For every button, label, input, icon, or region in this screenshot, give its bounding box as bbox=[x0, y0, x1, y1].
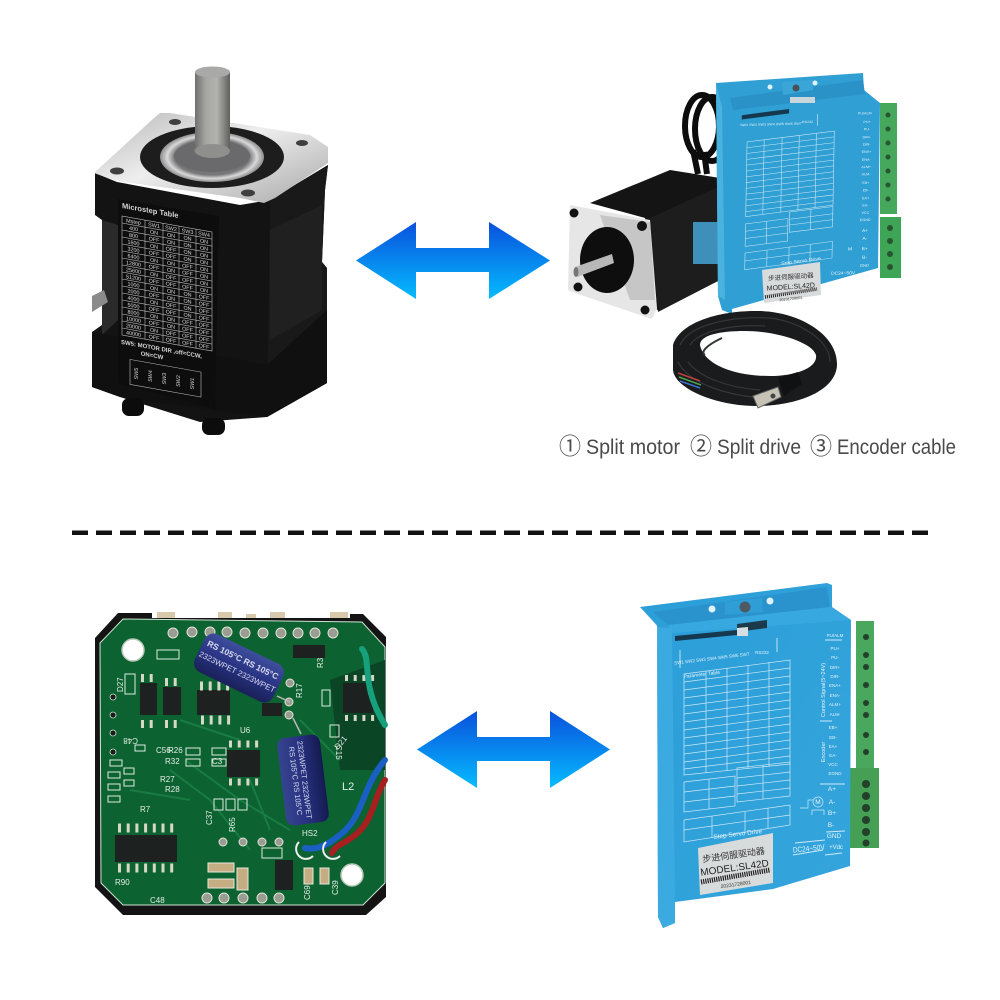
microstep table label: ON bbox=[167, 289, 175, 296]
silkscreen labels: U6 bbox=[240, 726, 251, 735]
circuit board photo bbox=[95, 612, 386, 915]
split motor and drive photo bbox=[568, 73, 901, 408]
silkscreen labels bbox=[115, 657, 354, 905]
microstep table label: OFF bbox=[199, 294, 210, 302]
microstep table label: ON bbox=[150, 300, 158, 307]
drive printed face: A- bbox=[829, 799, 835, 806]
microstep table label: SW5 bbox=[134, 367, 140, 380]
drive printed face: M bbox=[815, 799, 821, 806]
drive printed face: ALM- bbox=[830, 712, 841, 717]
silkscreen labels: R17 bbox=[295, 683, 304, 698]
drive printed face: ALM+ bbox=[861, 165, 871, 169]
silkscreen labels: D27 bbox=[116, 677, 125, 692]
microstep table label: ON bbox=[167, 296, 175, 303]
microstep table label: ON bbox=[200, 266, 208, 274]
caption: parts list: ② bbox=[690, 433, 712, 459]
microstep table label: OFF bbox=[166, 246, 177, 254]
microstep table label: OFF bbox=[199, 308, 210, 316]
silkscreen labels: R90 bbox=[115, 878, 130, 887]
drive printed face: DIR- bbox=[863, 143, 870, 147]
microstep table label: ON bbox=[200, 287, 208, 295]
microstep table label: OFF bbox=[182, 333, 194, 341]
microstep table label: ON bbox=[200, 252, 208, 260]
drive printed face: PU- bbox=[831, 655, 839, 660]
microstep table label: OFF bbox=[166, 274, 177, 282]
motor flange plate bbox=[94, 105, 328, 203]
drive printed face: B+ bbox=[862, 246, 868, 251]
drive printed face: PU- bbox=[864, 127, 870, 131]
integrated motor photo bbox=[92, 66, 328, 435]
drive model label bbox=[762, 262, 821, 303]
microstep table label: ON bbox=[200, 238, 208, 246]
microstep table label: OFF bbox=[149, 236, 160, 244]
drive printed face: EB- bbox=[829, 735, 837, 740]
drive printed face: PU+ bbox=[863, 120, 871, 124]
drive printed face: EGND bbox=[828, 771, 842, 776]
board housing bbox=[95, 613, 386, 915]
microstep table label: 2000 bbox=[127, 289, 140, 297]
microstep table label: ON bbox=[167, 317, 175, 324]
microstep table label: OFF bbox=[149, 278, 160, 286]
microstep table label: OFF bbox=[149, 306, 160, 314]
microstep table label: 3200 bbox=[127, 247, 140, 255]
encoder cable bbox=[673, 311, 837, 408]
microstep table label: ON bbox=[200, 245, 208, 253]
drive printed face: EB+ bbox=[862, 181, 869, 185]
chips bbox=[115, 645, 373, 890]
drive printed face: B- bbox=[862, 255, 868, 260]
drive printed face: Step Servo Drive bbox=[713, 828, 763, 841]
drive printed face: EA- bbox=[862, 204, 869, 207]
silkscreen labels: R3 bbox=[316, 657, 325, 668]
drive printed face: B+ bbox=[828, 810, 836, 817]
microstep table label: ON bbox=[183, 235, 192, 243]
microstep table label: OFF bbox=[182, 326, 194, 334]
drive case bbox=[640, 583, 851, 928]
drive printed face: GND bbox=[827, 833, 842, 840]
drive printed face: B- bbox=[828, 822, 834, 829]
microstep table label: ON bbox=[150, 244, 158, 251]
microstep table label: 5000 bbox=[127, 303, 140, 311]
microstep table label: 10000 bbox=[126, 316, 141, 325]
microstep table label: SW2 bbox=[165, 225, 177, 233]
microstep table label: ON bbox=[167, 324, 175, 331]
board shading and traces bbox=[130, 660, 385, 850]
capacitor: upper bbox=[191, 630, 287, 706]
mounting holes bbox=[122, 639, 363, 886]
microstep table label: ON bbox=[150, 286, 158, 293]
drive printed face: Control Signal(5~24V) bbox=[821, 663, 827, 717]
silkscreen labels: C48 bbox=[150, 896, 165, 905]
microstep table label: OFF bbox=[182, 277, 194, 285]
microstep table label: Mstep bbox=[126, 218, 141, 227]
microstep table label: 8000 bbox=[127, 310, 140, 318]
drive printed face: ALM- bbox=[862, 172, 870, 176]
microstep table label: ON bbox=[150, 258, 158, 265]
microstep table label: ON bbox=[183, 242, 192, 250]
silkscreen labels: C15 bbox=[334, 745, 343, 760]
drive printed face bbox=[737, 107, 873, 281]
microstep table label: 51200 bbox=[126, 274, 141, 283]
drive printed face: Parameter Table bbox=[683, 670, 721, 680]
microstep table label: OFF bbox=[149, 264, 160, 272]
header pads bbox=[168, 627, 338, 903]
double arrow: bottom bbox=[417, 711, 610, 788]
drive printed face: RS232 bbox=[802, 120, 813, 124]
drive printed face: EGND bbox=[860, 218, 871, 222]
drive model label bbox=[698, 833, 773, 895]
microstep table label: SW5: MOTOR DIR ,off=CCW, bbox=[121, 340, 202, 360]
drive printed face: DIR+ bbox=[830, 665, 841, 670]
silkscreen labels: C39 bbox=[331, 880, 340, 895]
microstep table label: SW2 bbox=[176, 375, 182, 388]
drive model label: MODEL:SL42D bbox=[700, 858, 770, 879]
drive printed face: GND bbox=[860, 264, 869, 268]
silkscreen labels: D21 bbox=[333, 734, 349, 751]
microstep table label: SW4 bbox=[198, 231, 210, 239]
drive printed face: ENA+ bbox=[829, 683, 841, 688]
microstep table label: ON bbox=[183, 256, 192, 264]
microstep table label: OFF bbox=[199, 343, 210, 351]
capacitor: lower bbox=[276, 734, 330, 826]
microstep table label: OFF bbox=[182, 340, 194, 348]
microstep table label: OFF bbox=[182, 263, 194, 271]
green terminal blocks bbox=[880, 103, 901, 278]
microstep table label: OFF bbox=[182, 270, 194, 278]
drive printed face: RS232 bbox=[755, 650, 769, 655]
drive printed face: +Vdc bbox=[829, 845, 843, 851]
drive printed face: DIR- bbox=[830, 674, 840, 679]
microstep table label: OFF bbox=[199, 322, 210, 330]
microstep table label: ON bbox=[150, 328, 158, 335]
drive printed face: SW1 SW2 SW3 SW4 SW5 SW6 SW7 bbox=[674, 651, 750, 666]
drive printed face: VCC bbox=[861, 211, 870, 215]
drive printed face: A- bbox=[862, 236, 868, 241]
microstep table label: OFF bbox=[149, 334, 160, 342]
microstep table label: 40000 bbox=[126, 330, 141, 339]
motor output shaft bbox=[195, 66, 230, 156]
microstep table label: OFF bbox=[182, 319, 194, 327]
microstep table label: SW1 bbox=[190, 377, 196, 390]
drive printed face: EA+ bbox=[829, 744, 838, 749]
microstep table label: SW3 bbox=[162, 372, 168, 385]
drive printed face: A+ bbox=[862, 228, 868, 233]
caption: parts list: Split drive bbox=[717, 436, 801, 459]
split motor bbox=[568, 170, 720, 319]
microstep table label: OFF bbox=[149, 292, 160, 300]
caption: parts list: Split motor bbox=[586, 436, 680, 459]
drive printed face: Encoder bbox=[821, 742, 827, 762]
microstep table label: 800 bbox=[129, 233, 138, 240]
microstep table label: 400 bbox=[129, 226, 138, 233]
microstep table label: 12800 bbox=[126, 260, 141, 269]
microstep table label: 20000 bbox=[126, 323, 141, 332]
silkscreen labels: C69 bbox=[303, 885, 312, 900]
microstep table label: SW1 bbox=[148, 222, 160, 230]
capacitor: upper: 2323WPET 2323WPET bbox=[197, 650, 277, 695]
drive printed face: ENA- bbox=[862, 158, 871, 162]
silkscreen labels: R65 bbox=[228, 817, 237, 832]
double arrow: top bbox=[356, 222, 550, 299]
microstep table label: ON bbox=[150, 272, 158, 279]
outlined pads bbox=[108, 650, 339, 858]
microstep table label: 6400 bbox=[127, 254, 140, 262]
drive printed face: PU/ALM bbox=[827, 633, 844, 638]
drive printed face: DC24~50V bbox=[792, 842, 825, 855]
drive printed face: ALM+ bbox=[829, 702, 841, 707]
microstep table label: 25600 bbox=[126, 267, 141, 276]
microstep table label: 1600 bbox=[127, 240, 140, 248]
microstep table label: ON bbox=[183, 298, 192, 306]
microstep table label: OFF bbox=[166, 302, 177, 310]
stand-alone drive photo bbox=[640, 583, 879, 928]
microstep table label: ON bbox=[167, 261, 175, 268]
drive printed face: M bbox=[848, 247, 852, 251]
microstep table label: ON bbox=[167, 268, 175, 275]
split drive bbox=[716, 73, 901, 314]
caption: parts list: Encoder cable bbox=[837, 436, 956, 459]
drive model label: MODEL:SL42D bbox=[767, 282, 815, 293]
microstep table label: OFF bbox=[166, 281, 177, 289]
microstep table label: Microstep Table bbox=[122, 201, 178, 220]
drive printed face: SW1 SW2 SW3 SW4 SW5 SW6 SW7 bbox=[740, 122, 802, 127]
drive printed face: EB- bbox=[863, 188, 869, 192]
microstep table label: OFF bbox=[166, 309, 177, 317]
side vias bbox=[110, 694, 116, 755]
connector tabs bbox=[157, 612, 348, 619]
microstep table label: SW3 bbox=[182, 228, 193, 236]
microstep table label: OFF bbox=[199, 336, 210, 344]
motor body bbox=[92, 165, 328, 435]
microstep table label: ON bbox=[200, 273, 208, 281]
capacitor: lower: RS 105°C RS 105°C bbox=[287, 746, 304, 816]
microstep table label: OFF bbox=[149, 320, 160, 328]
drive printed face: ENA+ bbox=[862, 150, 871, 154]
microstep table label: ON bbox=[150, 230, 158, 237]
silkscreen labels: C48 bbox=[123, 736, 138, 745]
microstep table label: ON bbox=[200, 280, 208, 288]
drive printed face: EA+ bbox=[862, 196, 869, 200]
microstep table label: ON=CW bbox=[141, 351, 164, 361]
silkscreen labels: R7 bbox=[140, 805, 151, 814]
drive model label: 20231728001 bbox=[720, 880, 752, 890]
drive model label: 20231728001 bbox=[779, 296, 803, 302]
drive printed face: ENA- bbox=[830, 693, 841, 698]
silkscreen labels: R32 bbox=[165, 757, 180, 766]
microstep table label: ON bbox=[183, 249, 192, 257]
split motor cable loop bbox=[685, 95, 729, 174]
wires bbox=[305, 649, 385, 853]
drive printed face: PU+ bbox=[831, 646, 840, 651]
microstep table label: OFF bbox=[182, 284, 194, 292]
capacitor leads bbox=[277, 696, 301, 734]
microstep table label: ON bbox=[167, 240, 175, 247]
silkscreen labels: C37 bbox=[205, 810, 214, 825]
drive model label: 步进伺服驱动器 bbox=[702, 845, 765, 864]
small components bbox=[208, 863, 329, 890]
drive printed face bbox=[674, 630, 845, 855]
drive printed face: PU/ALM bbox=[858, 111, 872, 115]
mounting tab and screw bbox=[708, 598, 774, 636]
green board bbox=[100, 619, 385, 905]
microstep table label: ON bbox=[183, 305, 192, 313]
microstep table label: ON bbox=[183, 291, 192, 299]
drive printed face: EB+ bbox=[829, 725, 838, 730]
drive printed face: DC24~50V bbox=[831, 270, 856, 276]
microstep table label: 4000 bbox=[127, 296, 140, 304]
caption: parts list bbox=[559, 433, 956, 459]
silkscreen labels: C3 bbox=[212, 757, 223, 766]
microstep table label: OFF bbox=[199, 315, 210, 323]
silkscreen labels: L2 bbox=[342, 781, 354, 793]
chip pins bbox=[118, 678, 375, 868]
drive printed face: DIR+ bbox=[862, 135, 871, 139]
microstep table label: ON bbox=[200, 259, 208, 267]
microstep table label: OFF bbox=[166, 253, 177, 261]
microstep table label: ON bbox=[183, 312, 192, 320]
wire solder joints bbox=[296, 842, 340, 859]
capacitor: upper: RS 105°C RS 105°C bbox=[206, 638, 280, 682]
silkscreen labels: R28 bbox=[165, 785, 180, 794]
drive printed face: VCC bbox=[828, 762, 838, 767]
microstep table label: ON bbox=[150, 314, 158, 321]
microstep table label: OFF bbox=[149, 250, 160, 258]
drive printed face: A+ bbox=[828, 786, 836, 793]
capacitor: lower: 2323WPET 2323WPET bbox=[295, 740, 314, 820]
caption: parts list: ③ bbox=[810, 433, 832, 459]
microstep table label: OFF bbox=[166, 330, 177, 338]
microstep table label: OFF bbox=[199, 329, 210, 337]
drive model label: 步进伺服驱动器 bbox=[768, 271, 814, 283]
drive printed face: EA- bbox=[829, 753, 837, 758]
silkscreen labels: R27 bbox=[160, 775, 175, 784]
microstep table label: SW4 bbox=[148, 370, 154, 383]
microstep table label: ON bbox=[167, 233, 175, 240]
drive printed face: Step Servo Drive bbox=[781, 256, 822, 267]
silkscreen labels: C56 bbox=[156, 746, 171, 755]
drive printed face: +Vdc bbox=[860, 274, 869, 278]
green terminal blocks bbox=[849, 621, 879, 848]
microstep table label bbox=[118, 199, 219, 409]
silkscreen labels: R26 bbox=[168, 746, 183, 755]
caption: parts list: ① bbox=[559, 433, 581, 459]
microstep table label: 1000 bbox=[127, 282, 140, 290]
microstep table label: OFF bbox=[199, 301, 210, 309]
silkscreen labels: HS2 bbox=[302, 829, 318, 838]
microstep table label: OFF bbox=[166, 337, 177, 345]
